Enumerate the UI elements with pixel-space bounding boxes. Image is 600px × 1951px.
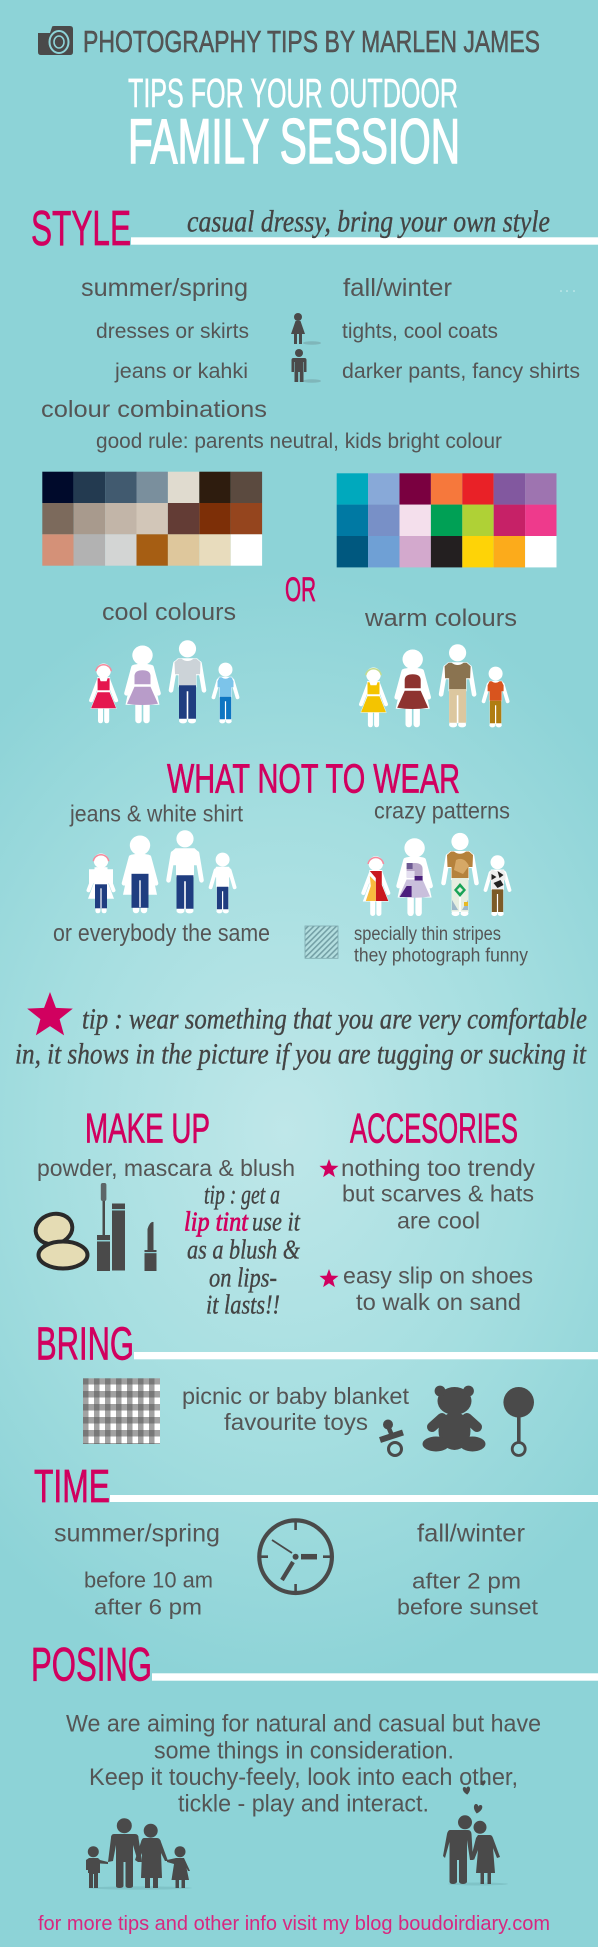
label: jeans and white shirt: jeans & white shirt bbox=[69, 800, 244, 826]
posing text: We are aiming for natural and casual but have bbox=[66, 1711, 541, 1738]
palette: bright swatches bbox=[337, 473, 556, 567]
heading: bring: BRING bbox=[36, 1317, 134, 1369]
times: fall/winter: before sunset bbox=[397, 1594, 538, 1619]
label: warm colours: warm colours bbox=[364, 605, 517, 632]
heading: style bbox=[31, 202, 598, 256]
season lists bbox=[81, 274, 580, 383]
panel: make up bbox=[32, 1104, 301, 1319]
panel: bring bbox=[36, 1317, 598, 1456]
times: summer/spring: before 10 am bbox=[84, 1568, 213, 1593]
times: summer/spring: summer/spring bbox=[54, 1520, 220, 1548]
accessory note two bbox=[343, 1262, 533, 1315]
make up list: powder, mascara & blush bbox=[37, 1155, 295, 1181]
bring list: picnic or baby blanket bbox=[182, 1383, 410, 1409]
season lists: fall/winter bbox=[343, 274, 452, 302]
decorative dots bbox=[560, 290, 575, 292]
times: fall/winter bbox=[397, 1520, 538, 1619]
bring list: favourite toys bbox=[224, 1409, 368, 1435]
accessory note one: are cool bbox=[397, 1207, 480, 1233]
times: fall/winter: fall/winter bbox=[417, 1520, 525, 1548]
title bbox=[128, 70, 460, 177]
icon: powder compact bbox=[32, 1210, 88, 1268]
icon: couple with hearts bbox=[443, 1780, 508, 1886]
icon: gingham blanket bbox=[83, 1378, 160, 1444]
times: summer/spring: after 6 pm bbox=[94, 1594, 202, 1619]
season lists: jeans or kahki bbox=[114, 360, 248, 383]
tip text bbox=[15, 1002, 587, 1070]
footer: for more tips and other info visit my blog boudoirdiary.com bbox=[38, 1913, 550, 1935]
panel: posing bbox=[31, 1638, 598, 1890]
heading: make up: MAKE UP bbox=[85, 1104, 210, 1151]
accessory note one: nothing too trendy bbox=[341, 1155, 536, 1181]
tip: lip tint: as a blush & bbox=[187, 1234, 300, 1264]
palette: neutral swatches bbox=[42, 472, 262, 566]
season lists: tights, cool coats bbox=[342, 320, 498, 343]
posing text: some things in consideration. bbox=[154, 1737, 454, 1764]
icon: thin stripes swatch bbox=[305, 926, 338, 958]
note: thin stripes: they photograph funny bbox=[354, 946, 528, 967]
label: crazy patterns: crazy patterns bbox=[374, 797, 510, 823]
icon: clock bbox=[259, 1520, 332, 1593]
icon: rattle bbox=[503, 1387, 534, 1456]
icon: star bullet two bbox=[319, 1269, 339, 1287]
tip: lip tint: tip : get a bbox=[204, 1179, 280, 1209]
heading: colour combinations: colour combinations bbox=[41, 396, 267, 422]
panel: accessories bbox=[319, 1104, 536, 1315]
good rule text: good rule: parents neutral, kids bright colour bbox=[96, 430, 502, 453]
header: photography tips by bbox=[38, 24, 540, 59]
icon: camera bbox=[38, 26, 73, 55]
accessory note two: easy slip on shoes bbox=[343, 1262, 533, 1288]
icon: family holding hands bbox=[86, 1818, 192, 1890]
or: OR bbox=[285, 571, 316, 609]
accessory note one bbox=[341, 1155, 536, 1233]
heading: what not to wear: WHAT NOT TO WEAR bbox=[167, 756, 460, 802]
note: thin stripes: specially thin stripes bbox=[354, 924, 501, 945]
posing text: tickle - play and interact. bbox=[178, 1791, 429, 1818]
icon: pacifier bbox=[380, 1420, 403, 1456]
season lists: dresses or skirts bbox=[96, 320, 249, 343]
icon: star bbox=[27, 992, 73, 1035]
icon: teddy bear bbox=[422, 1386, 486, 1452]
times: fall/winter: after 2 pm bbox=[412, 1568, 521, 1593]
heading: posing bbox=[31, 1638, 598, 1691]
tip: lip tint: use it bbox=[252, 1207, 301, 1237]
label: cool colours: cool colours bbox=[102, 599, 236, 626]
season lists: summer/spring bbox=[81, 274, 248, 302]
heading: time bbox=[34, 1460, 598, 1512]
posing text: Keep it touchy-feely, look into each other, bbox=[89, 1764, 518, 1791]
callout: comfort tip bbox=[15, 992, 587, 1070]
posing text bbox=[66, 1711, 541, 1818]
tip: lip tint: lip tint bbox=[184, 1207, 249, 1237]
family: cool colours bbox=[91, 640, 237, 723]
panel: style bbox=[31, 202, 598, 727]
tip: lip tint: on lips- bbox=[209, 1263, 277, 1293]
label: or everybody the same: or everybody the same bbox=[53, 920, 270, 947]
heading: time: TIME bbox=[34, 1460, 110, 1512]
heading: bring bbox=[36, 1317, 598, 1369]
accessory note one: but scarves & hats bbox=[342, 1181, 534, 1207]
icon: lipstick bbox=[144, 1222, 156, 1271]
family: warm colours bbox=[360, 644, 508, 727]
icon: mascara bbox=[97, 1183, 125, 1271]
accessory note two: to walk on sand bbox=[356, 1289, 521, 1315]
family: jeans and white shirts bbox=[88, 830, 235, 913]
season lists: darker pants, fancy shirts bbox=[342, 360, 580, 383]
heading: posing: POSING bbox=[31, 1638, 152, 1691]
icon: girl silhouette bbox=[291, 313, 321, 345]
bring list bbox=[182, 1383, 410, 1435]
panel: what not to wear bbox=[53, 756, 528, 967]
tip: lip tint bbox=[184, 1179, 301, 1319]
family: crazy patterns bbox=[363, 833, 510, 916]
icon: boy silhouette bbox=[292, 349, 321, 383]
panel: time bbox=[34, 1460, 598, 1619]
icon: star bullet one bbox=[319, 1159, 339, 1177]
note: thin stripes bbox=[354, 924, 528, 967]
tip: lip tint: it lasts!! bbox=[206, 1289, 280, 1319]
times: summer/spring bbox=[54, 1520, 220, 1619]
heading: style: STYLE bbox=[31, 202, 131, 256]
